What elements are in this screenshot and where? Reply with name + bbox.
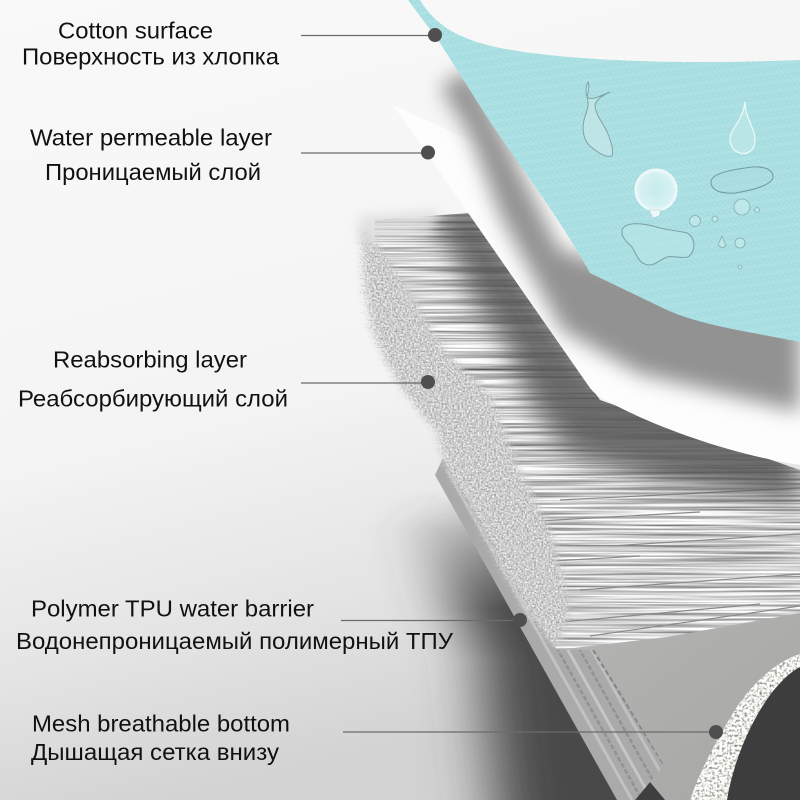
soft fade at top edge xyxy=(358,210,440,244)
callout: mesh breathable bottom xyxy=(31,710,723,765)
droplet: pale teardrop xyxy=(730,102,755,153)
callout: water permeable layer xyxy=(30,124,435,185)
callout: reabsorbing layer xyxy=(18,346,435,412)
callout: cotton surface: Поверхность из хлопка xyxy=(22,44,280,70)
callout: cotton surface xyxy=(22,18,442,70)
water droplets xyxy=(583,82,773,269)
callout: reabsorbing layer: Reabsorbing layer xyxy=(53,346,247,372)
droplet: squiggle xyxy=(583,82,613,156)
layer: reabsorbing layer xyxy=(355,210,800,650)
droplet: ball tip xyxy=(649,210,661,218)
layer: polymer TPU water barrier xyxy=(435,458,688,800)
shadow from white sheet xyxy=(430,205,800,505)
callout: mesh breathable bottom: Mesh breathable bottom xyxy=(32,710,290,736)
foam edge of mesh xyxy=(690,654,800,800)
fibre streaks xyxy=(360,190,800,660)
droplet: small beads xyxy=(690,199,760,269)
callout: cotton surface: Cotton surface xyxy=(58,18,213,44)
droplet: flat oval xyxy=(711,167,773,193)
callout: reabsorbing layer: Реабсорбирующий слой xyxy=(18,386,288,412)
callout: water permeable layer: Проницаемый слой xyxy=(45,159,261,185)
droplet: large blob xyxy=(622,224,694,265)
layer: cotton surface xyxy=(408,0,800,342)
callout: water permeable layer: Water permeable layer xyxy=(30,124,272,150)
droplet: round ball xyxy=(634,168,678,212)
dark notch xyxy=(635,782,665,800)
callout: mesh breathable bottom: Дышащая сетка внизу xyxy=(31,739,279,765)
thin dark fibres xyxy=(540,487,800,637)
layer: water permeable layer xyxy=(393,105,800,465)
foam edge of fibres xyxy=(356,230,574,650)
shadow of cotton layer xyxy=(440,70,800,412)
mesh panel xyxy=(557,613,800,800)
callout: polymer TPU water barrier xyxy=(16,596,527,654)
callout: polymer TPU water barrier: Водонепроницаемый полимерный ТПУ xyxy=(16,628,454,654)
cast shadow under layers xyxy=(425,490,800,800)
dark underside xyxy=(700,640,800,800)
callout: polymer TPU water barrier: Polymer TPU water barrier xyxy=(31,596,314,622)
layer: mesh breathable bottom xyxy=(557,613,800,800)
